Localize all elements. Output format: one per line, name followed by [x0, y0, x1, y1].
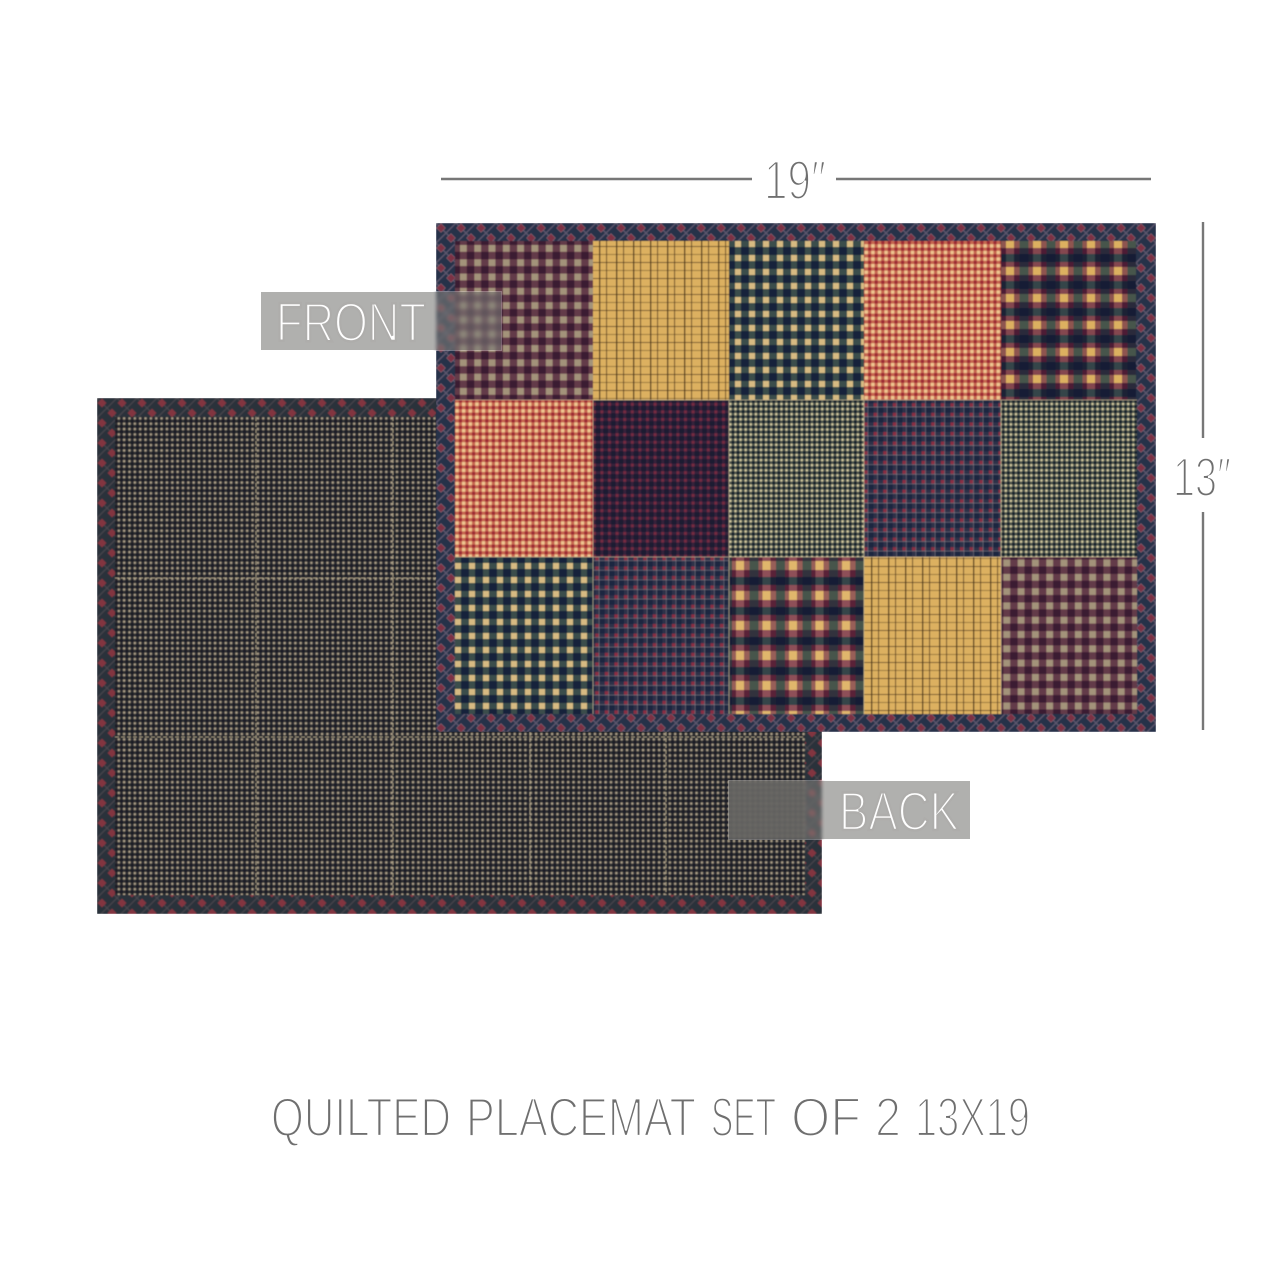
caption: product name: OF — [791, 1086, 861, 1148]
front patch row 1 — [455, 241, 1136, 400]
front patch row 3 — [455, 557, 1137, 714]
back placemat quilting stitches — [115, 417, 805, 895]
front patch row 2 — [455, 400, 1137, 557]
caption: product name: QUILTED — [271, 1086, 451, 1148]
height dimension line — [1202, 222, 1204, 730]
back placemat binding — [97, 398, 822, 914]
back placemat fabric — [115, 417, 805, 895]
caption: product name: 2 — [875, 1086, 901, 1148]
width label 19 inches: 19″ — [764, 149, 826, 211]
label: BACK — [728, 780, 971, 840]
back placemat — [97, 398, 822, 914]
caption: product name: SET — [711, 1086, 776, 1148]
front placemat binding — [436, 223, 1156, 732]
caption: product name: 13X19 — [915, 1086, 1030, 1148]
front patch seams — [455, 400, 1137, 714]
front placemat — [436, 223, 1156, 732]
caption: product name — [271, 1086, 1030, 1148]
width dimension line — [441, 178, 1151, 180]
height label 13 inches: 13″ — [1173, 446, 1231, 508]
caption: product name: PLACEMAT — [466, 1086, 696, 1148]
